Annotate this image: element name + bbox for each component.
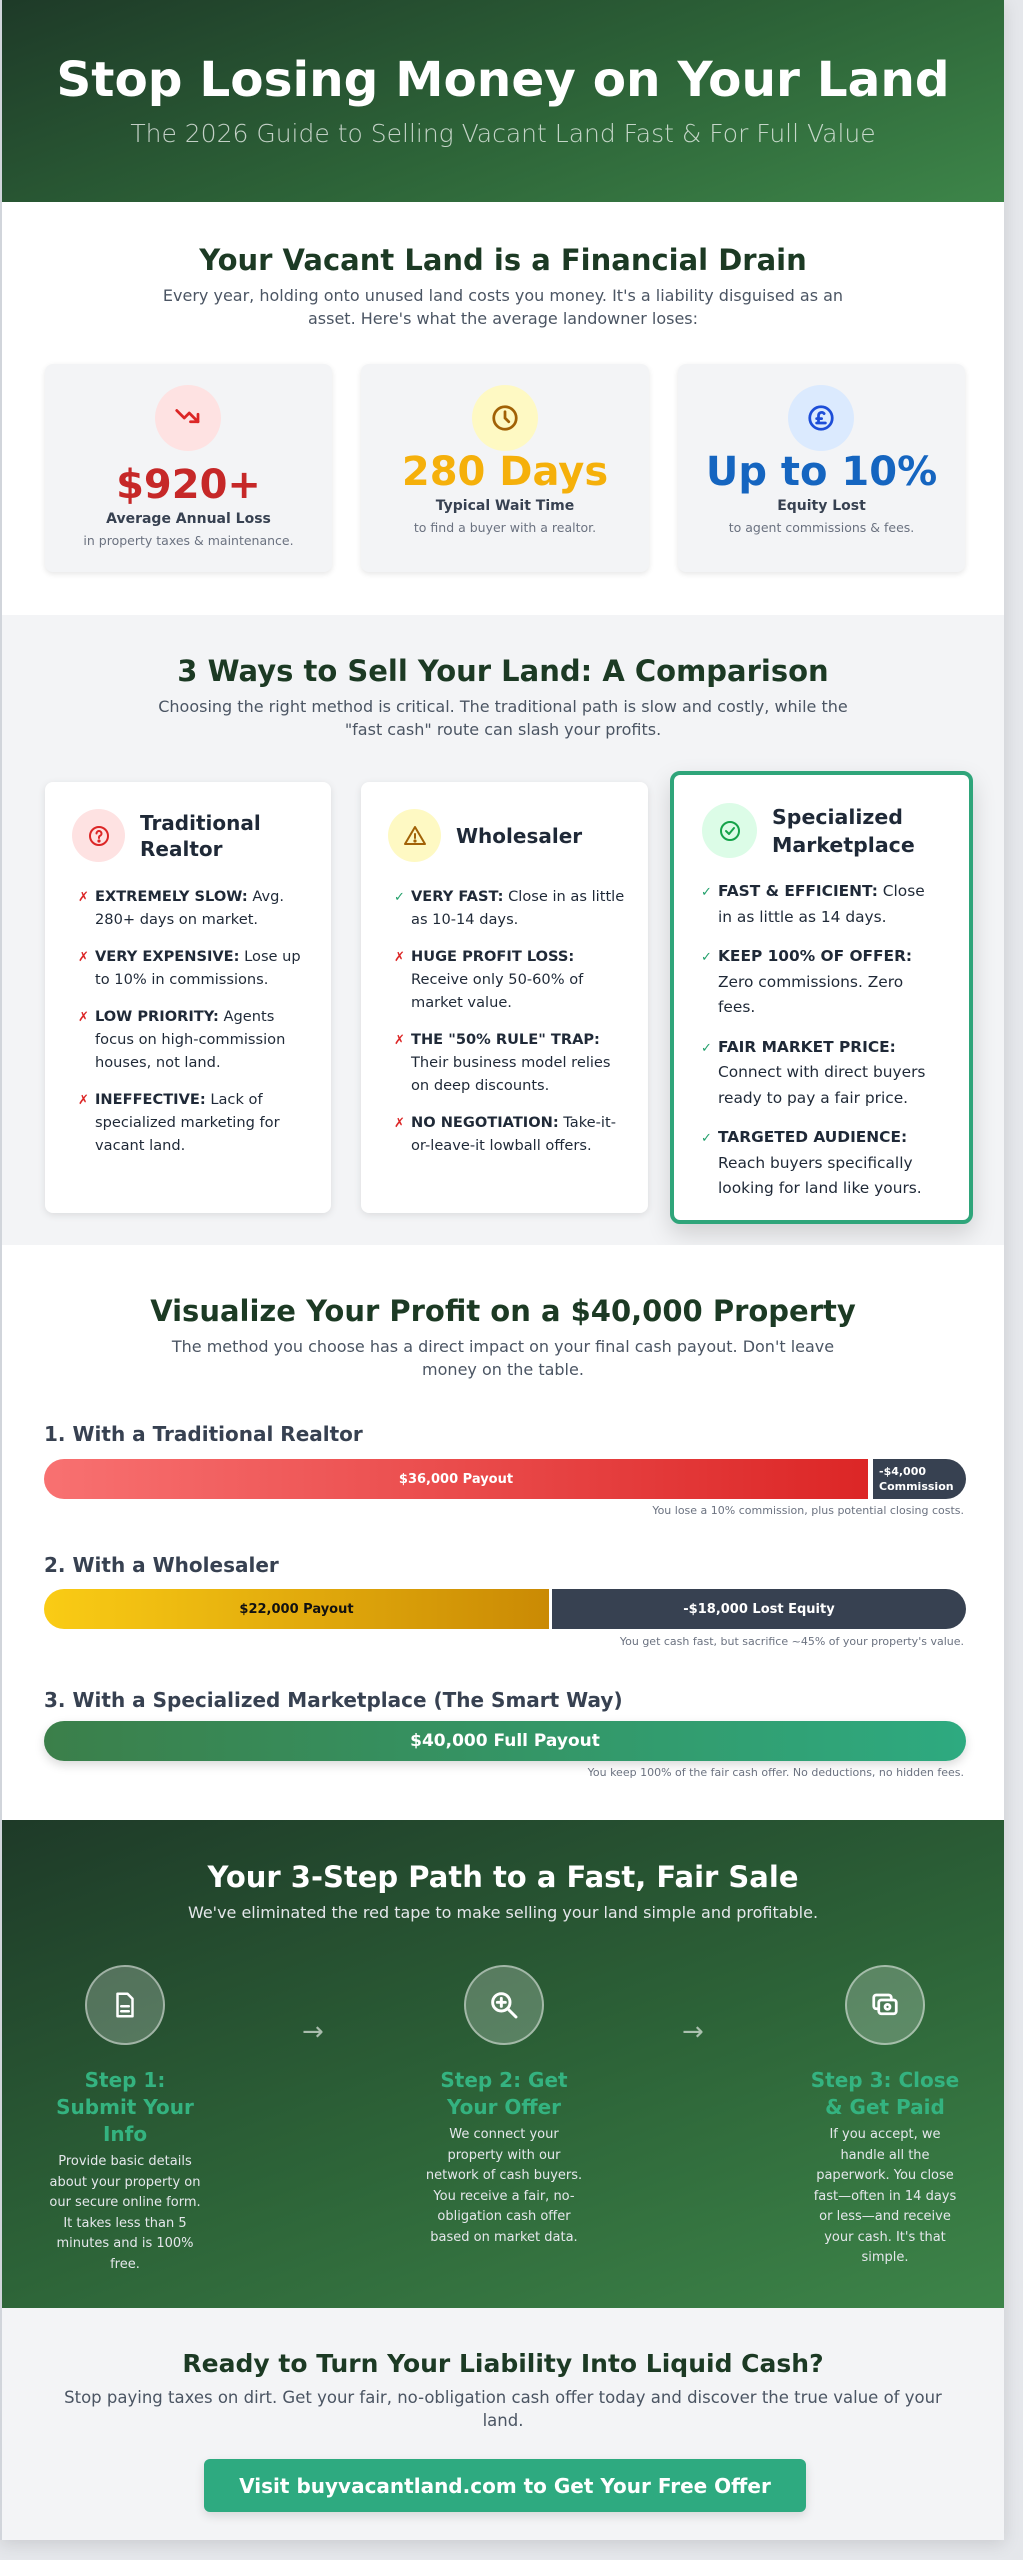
- step 3: & Get Paid: [825, 2095, 945, 2119]
- step 1: Step 1:: [85, 2068, 165, 2092]
- list: marketplace benefits: FAIR MARKET PRICE: Connect with direct buyers ready to pay a fair price.: [718, 1038, 925, 1106]
- list: realtor drawbacks: ✗: [78, 950, 89, 965]
- card: wholesaler: [361, 782, 648, 1213]
- step 1: Provide basic details about your property on our secure online form. It takes less than 5 minutes and is 100% free.: [49, 2154, 201, 2272]
- text: Stop paying taxes on dirt. Get your fair, no-obligation cash offer today and discover the true value of your land.: [64, 2388, 942, 2430]
- list: wholesaler points: ✓: [394, 890, 405, 905]
- icon: pound coin: [788, 385, 854, 451]
- arrow: →: [302, 2017, 324, 2047]
- card: traditional realtor: [45, 782, 331, 1213]
- step 2: [426, 1965, 582, 2244]
- stat note: to find a buyer with a realtor.: [414, 520, 596, 535]
- list: realtor drawbacks: ✗: [78, 890, 89, 905]
- bar chart: realtor: -$4,000: [879, 1465, 926, 1478]
- card title: [772, 805, 915, 857]
- section: call to action: [2, 2308, 1004, 2540]
- step 1: Info: [103, 2122, 147, 2146]
- heading: Visualize Your Profit on a $40,000 Property: [150, 1294, 856, 1328]
- section: 3-step path: [2, 1820, 1004, 2308]
- icon: cash: [845, 1965, 925, 2045]
- icon: warning: [388, 809, 441, 862]
- heading: Ready to Turn Your Liability Into Liquid Cash?: [182, 2349, 824, 2378]
- list: marketplace benefits: ✓: [701, 1131, 712, 1146]
- caption: wholesaler: You get cash fast, but sacrifice ~45% of your property's value.: [620, 1635, 964, 1648]
- step 3: Step 3: Close: [811, 2068, 959, 2092]
- list: marketplace benefits: ✓: [701, 1040, 712, 1056]
- card title: Traditional: [140, 811, 261, 835]
- heading: 3 Ways to Sell Your Land: A Comparison: [177, 654, 829, 688]
- step 1: Submit Your: [56, 2095, 194, 2119]
- step 2: Step 2: Get: [440, 2068, 568, 2092]
- title: Stop Losing Money on Your Land: [56, 52, 950, 108]
- list: realtor drawbacks: EXTREMELY SLOW: Avg. 280+ days on market.: [95, 888, 284, 928]
- button: Visit buyvacantland.com to Get Your Free Offer: [239, 2474, 771, 2498]
- list: marketplace benefits: ✓: [701, 950, 712, 965]
- list: wholesaler points: THE "50% RULE" TRAP: Their business model relies on deep discounts.: [411, 1031, 611, 1094]
- list: wholesaler points: ✗: [394, 950, 405, 965]
- intro text: The method you choose has a direct impact on your final cash payout. Don't leave money on the table.: [172, 1337, 834, 1379]
- heading: Your 3-Step Path to a Fast, Fair Sale: [208, 1860, 798, 1894]
- bar chart: realtor: [44, 1459, 966, 1499]
- bar chart: wholesaler: -$18,000 Lost Equity: [683, 1602, 835, 1616]
- icon: clock: [472, 385, 538, 451]
- icon: check circle: [702, 803, 757, 858]
- stat value: $920+: [116, 462, 261, 508]
- step 2: Your Offer: [447, 2095, 561, 2119]
- section: comparison: [2, 615, 1004, 1245]
- list: realtor drawbacks: ✗: [78, 1010, 89, 1025]
- stat value: 280 Days: [402, 449, 608, 495]
- step 2: We connect your property with our network of cash buyers. You receive a fair, no-obligation cash offer based on market data.: [426, 2127, 582, 2244]
- step 3: [811, 1965, 959, 2265]
- subtitle: The 2026 Guide to Selling Vacant Land Fast & For Full Value: [130, 119, 876, 148]
- caption: marketplace: You keep 100% of the fair cash offer. No deductions, no hidden fees.: [588, 1766, 964, 1779]
- list: wholesaler points: ✗: [394, 1116, 405, 1131]
- bar label: marketplace: 3. With a Specialized Marketplace (The Smart Way): [44, 1688, 623, 1712]
- intro text: Every year, holding onto unused land costs you money. It's a liability disguised as an asset. Here's what the average landowner loses:: [163, 286, 843, 328]
- list: wholesaler points: NO NEGOTIATION: Take-it-or-leave-it lowball offers.: [411, 1114, 616, 1154]
- list: wholesaler points: [394, 888, 624, 1154]
- icon: trending down: [155, 385, 221, 451]
- list: marketplace benefits: TARGETED AUDIENCE: Reach buyers specifically looking for land like yours.: [718, 1128, 922, 1197]
- bar label: realtor: 1. With a Traditional Realtor: [44, 1422, 363, 1446]
- list: wholesaler points: ✗: [394, 1033, 405, 1048]
- intro text: Choosing the right method is critical. The traditional path is slow and costly, while the "fast cash" route can slash your profits.: [158, 697, 848, 739]
- caption: realtor: You lose a 10% commission, plus potential closing costs.: [652, 1504, 964, 1517]
- stat card: annual loss: [45, 364, 332, 572]
- list: realtor drawbacks: VERY EXPENSIVE: Lose up to 10% in commissions.: [95, 948, 301, 988]
- card: specialized marketplace: [670, 771, 973, 1224]
- step 3: If you accept, we handle all the paperwork. You close fast—often in 14 days or less—and receive your cash. It's that simple.: [814, 2127, 956, 2265]
- button: [204, 2459, 806, 2512]
- section: profit visualization: [2, 1245, 1004, 1820]
- icon: magnifier: [464, 1965, 544, 2045]
- card title: [140, 811, 261, 861]
- bar label: wholesaler: 2. With a Wholesaler: [44, 1553, 279, 1577]
- stat label: Average Annual Loss: [106, 511, 271, 527]
- list: wholesaler points: VERY FAST: Close in as little as 10-14 days.: [411, 888, 624, 928]
- subtitle: We've eliminated the red tape to make selling your land simple and profitable.: [188, 1903, 818, 1922]
- card title: Realtor: [140, 837, 222, 861]
- bar chart: wholesaler: $22,000 Payout: [239, 1602, 354, 1616]
- list: marketplace benefits: KEEP 100% OF OFFER: Zero commissions. Zero fees.: [718, 947, 912, 1016]
- bar chart: wholesaler: [44, 1589, 966, 1629]
- stat card: equity lost: [678, 364, 965, 572]
- list: marketplace benefits: [701, 882, 925, 1197]
- icon: question: [72, 809, 125, 862]
- card title: Wholesaler: [456, 824, 582, 848]
- list: realtor drawbacks: INEFFECTIVE: Lack of specialized marketing for vacant land.: [95, 1091, 280, 1154]
- stat note: to agent commissions & fees.: [729, 520, 914, 535]
- list: wholesaler points: HUGE PROFIT LOSS: Receive only 50-60% of market value.: [411, 948, 583, 1011]
- bar chart: realtor: $36,000 Payout: [399, 1472, 513, 1486]
- header: [2, 0, 1004, 202]
- stat label: Typical Wait Time: [436, 498, 574, 514]
- icon: document: [85, 1965, 165, 2045]
- arrow: →: [682, 2017, 704, 2047]
- stat card: wait time: [361, 364, 649, 572]
- card title: Specialized: [772, 805, 903, 829]
- stat value: Up to 10%: [706, 449, 937, 495]
- stat note: in property taxes & maintenance.: [83, 533, 294, 548]
- list: marketplace benefits: FAST & EFFICIENT: Close in as little as 14 days.: [718, 882, 925, 926]
- step 1: [49, 1965, 201, 2272]
- stat label: Equity Lost: [777, 498, 866, 514]
- list: realtor drawbacks: LOW PRIORITY: Agents focus on high-commission houses, not land.: [95, 1008, 285, 1071]
- list: realtor drawbacks: ✗: [78, 1093, 89, 1108]
- list: marketplace benefits: ✓: [701, 885, 712, 900]
- bar chart: marketplace: $40,000 Full Payout: [410, 1731, 600, 1751]
- list: realtor drawbacks: [78, 888, 301, 1154]
- card title: Marketplace: [772, 833, 915, 857]
- heading: Your Vacant Land is a Financial Drain: [199, 243, 807, 277]
- bar chart: marketplace: [44, 1721, 966, 1761]
- section: financial drain: [2, 202, 1004, 615]
- bar chart: realtor: Commission: [879, 1480, 954, 1493]
